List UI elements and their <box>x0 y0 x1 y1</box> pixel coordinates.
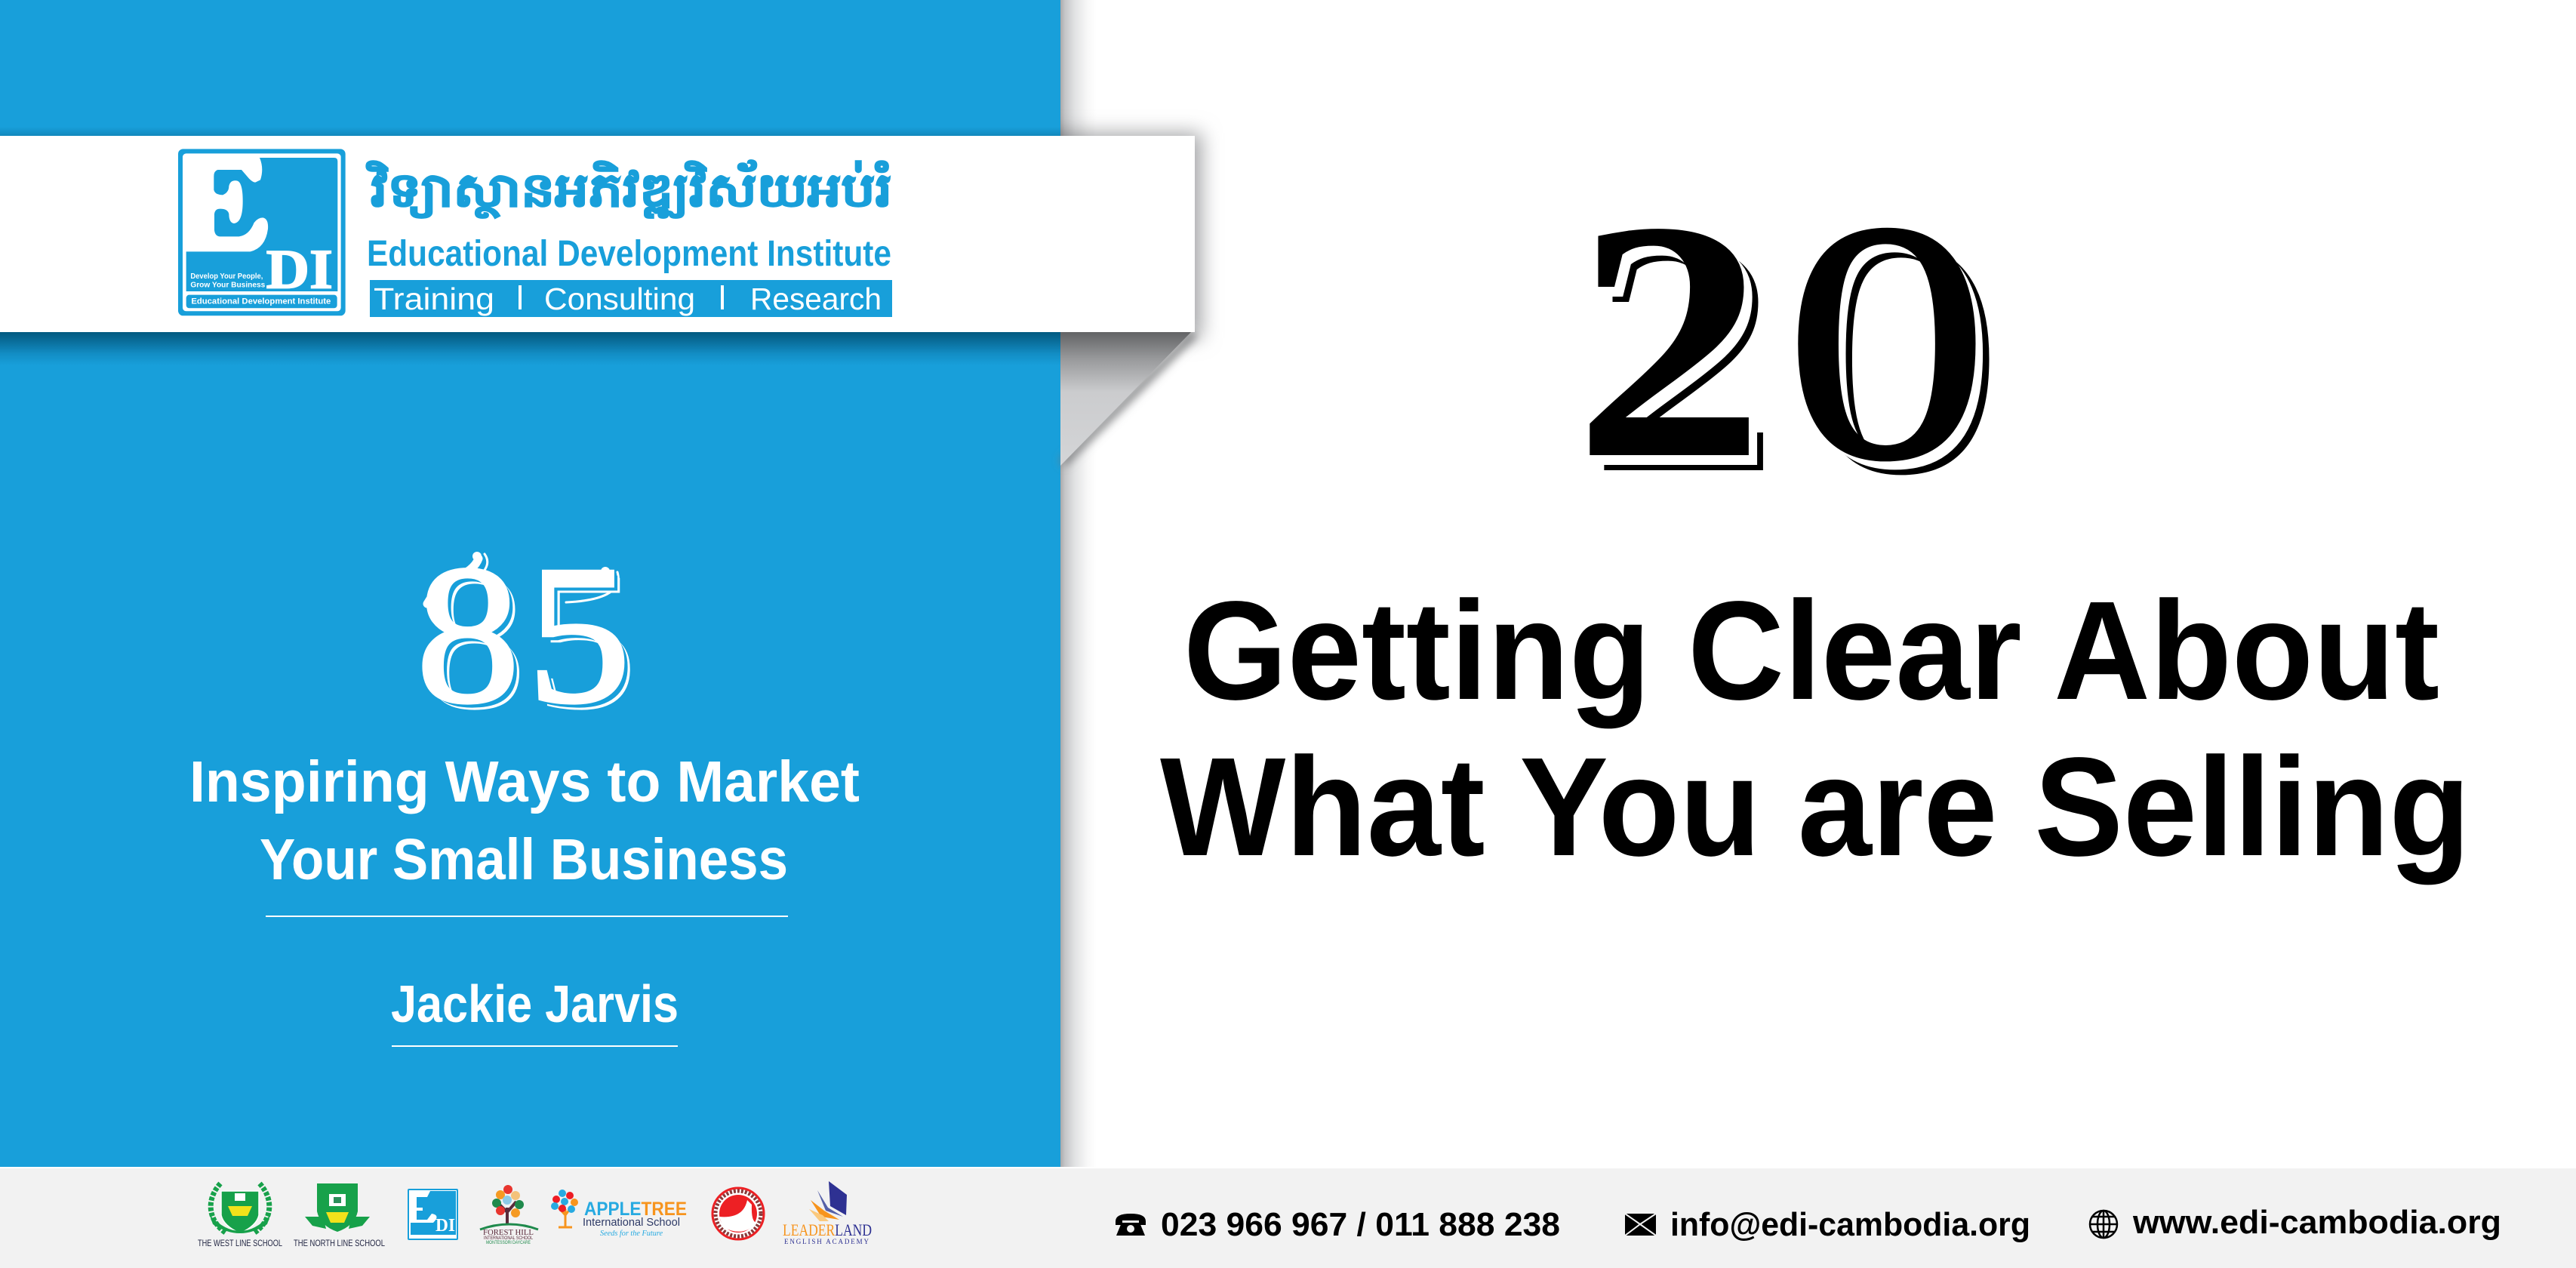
English institute name: Educational Development Institute <box>367 234 891 274</box>
logo: EDI: Grow Your Business <box>190 282 266 290</box>
divider <box>266 916 788 917</box>
logo: red round emblem <box>712 1188 764 1239</box>
paper fold <box>1060 332 1194 466</box>
logo: EDI: DI <box>266 239 333 301</box>
logo: North Line School <box>294 1183 385 1248</box>
author underline <box>392 1045 678 1047</box>
icon: envelope <box>1625 1214 1656 1236</box>
logo: Appletree International School <box>551 1190 687 1238</box>
logo: West Line School <box>198 1183 282 1248</box>
logo: West Line School: THE WEST LINE SCHOOL <box>198 1238 282 1248</box>
tagline bar: Consulting <box>544 282 695 316</box>
logo: Leaderland English Academy: ENGLISH ACADEMY <box>784 1238 870 1245</box>
tagline bar <box>370 280 892 317</box>
logo: Forest Hill <box>480 1185 538 1245</box>
band bottom shadow <box>0 332 1060 365</box>
logo: Appletree International School: Seeds for the Future <box>600 1229 663 1238</box>
cover number digit 8: 8 <box>416 525 520 744</box>
big number digit 0: 0 <box>1784 152 1990 531</box>
Khmer institute name: វិទ្យាស្ថានអភិវឌ្ឍវិស័យអប់រំ <box>366 159 892 219</box>
logo: Leaderland English Academy: LEADERLAND <box>783 1220 872 1239</box>
phone numbers: 023 966 967 / 011 888 238 <box>1161 1206 1560 1243</box>
subtitle line 1: Inspiring Ways to Market <box>189 749 860 814</box>
footer bar <box>0 1168 2576 1268</box>
author: Jackie Jarvis <box>391 974 679 1033</box>
white logo band <box>0 136 1195 332</box>
logo: EDI <box>178 149 346 315</box>
website: www.edi-cambodia.org <box>2132 1204 2501 1241</box>
big number digit 2: 2 <box>1574 150 1765 529</box>
tagline bar: Training <box>374 282 494 316</box>
logo: Leaderland English Academy <box>783 1181 872 1245</box>
logo: EDI small: DI <box>435 1216 455 1236</box>
logo: North Line School: THE NORTH LINE SCHOOL <box>294 1238 385 1248</box>
logo: Forest Hill: INTERNATIONAL SCHOOL <box>484 1236 534 1241</box>
swashes on 85 <box>427 552 618 604</box>
logo: EDI small <box>408 1189 458 1240</box>
logo: Forest Hill: MONTESSORI DAYCARE <box>486 1241 531 1245</box>
band soft shadow on white <box>981 133 1202 338</box>
cover number digit 5: 5 <box>527 525 631 744</box>
logo: EDI: Develop Your People, <box>190 272 263 281</box>
logo: EDI: Educational Development Institute <box>191 297 331 306</box>
tagline bar: Research <box>750 282 882 316</box>
logo: Forest Hill: FOREST HILL <box>483 1228 534 1237</box>
logo: Appletree International School: APPLETREE <box>584 1199 687 1220</box>
logo: Appletree International School: International School <box>583 1216 680 1229</box>
panel shadow <box>1060 0 1097 1167</box>
band top shadow on blue <box>0 127 1060 136</box>
subtitle line 2: Your Small Business <box>260 827 788 892</box>
icon: globe <box>2090 1211 2117 1238</box>
panel: blue book cover <box>0 0 1060 1167</box>
heading line 1: Getting Clear About <box>1183 573 2439 729</box>
icon: telephone <box>1116 1214 1146 1236</box>
email: info@edi-cambodia.org <box>1670 1206 2030 1243</box>
heading line 2: What You are Selling <box>1160 729 2470 885</box>
